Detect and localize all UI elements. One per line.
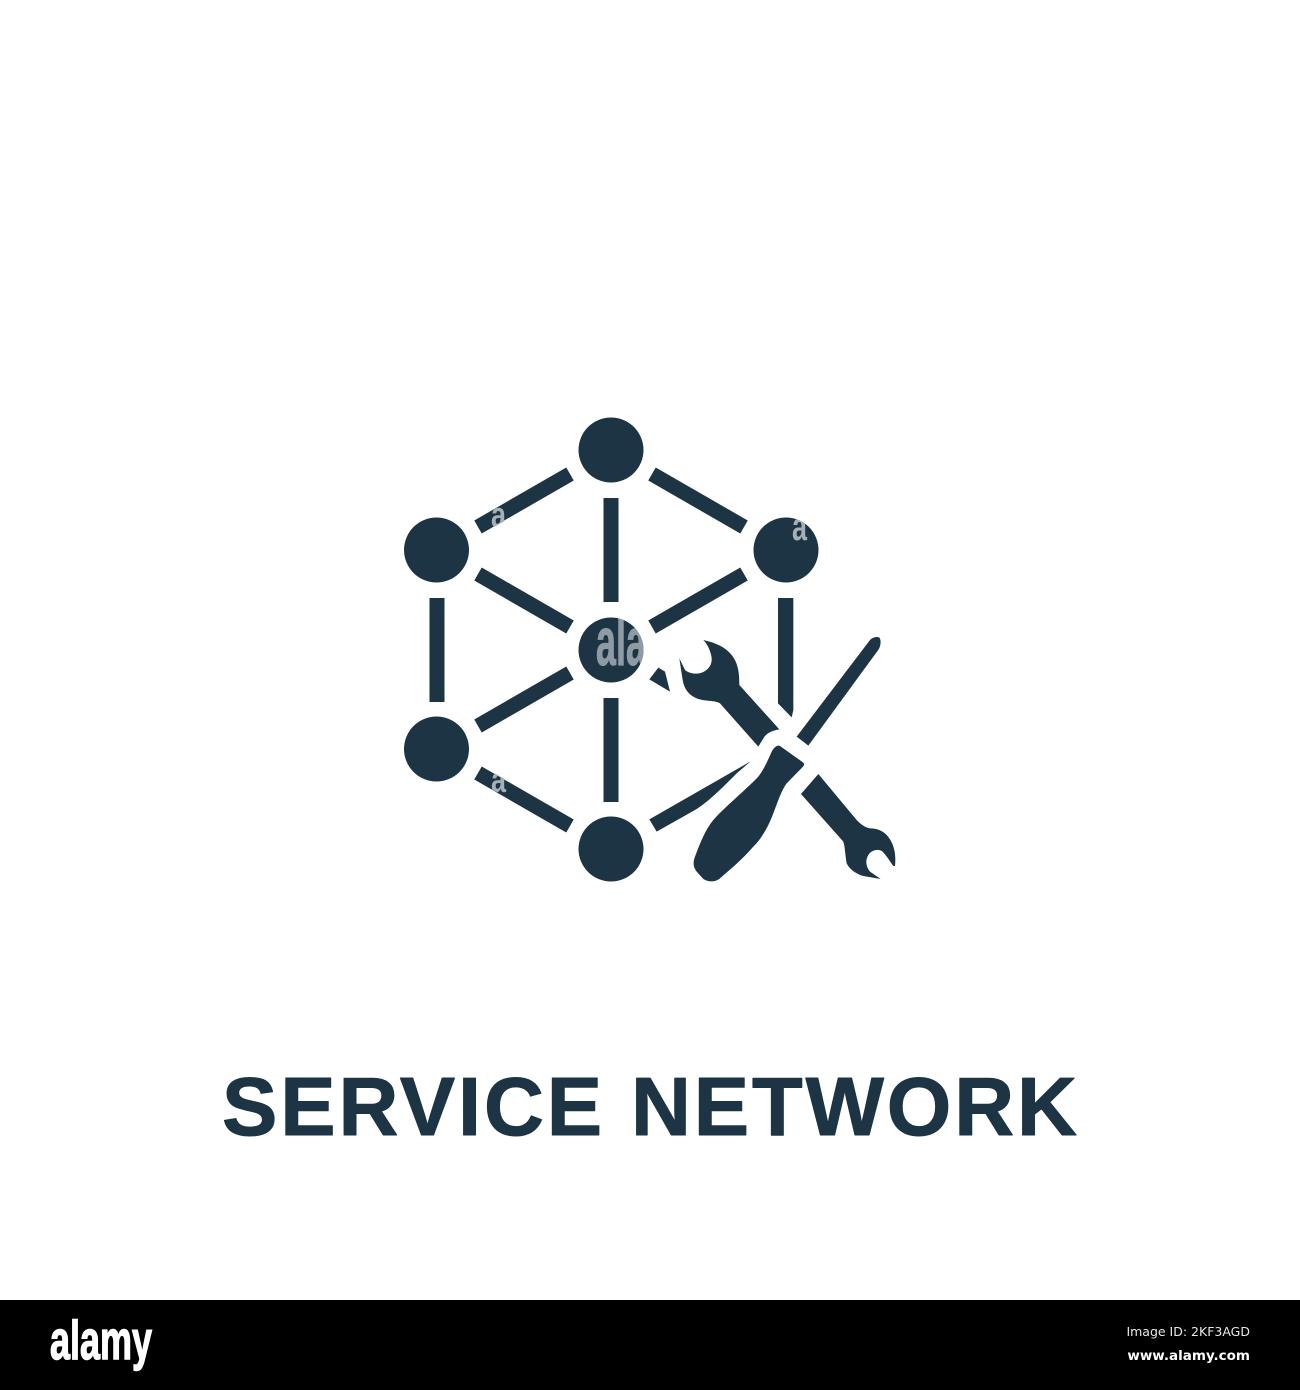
watermark on right node: a [792, 505, 808, 549]
title: SERVICE NETWORK [222, 1060, 1077, 1153]
footer band [0, 1300, 1300, 1390]
icon: screwdriver handle [694, 746, 804, 881]
right vertical line [778, 598, 793, 717]
icon: wrench upper half [679, 640, 779, 747]
icon: wrench lower half [801, 774, 895, 879]
network nodes [404, 418, 818, 882]
watermark on upper left line: a [491, 494, 507, 535]
watermark over hub node: ala [596, 604, 647, 680]
alamy logo: alamy [50, 1309, 152, 1371]
watermark on lower left line: a [491, 759, 507, 800]
website: www.alamy.com [1127, 1348, 1250, 1364]
icon: screwdriver blade [797, 637, 881, 746]
icon: service network [404, 418, 895, 882]
line fragment [649, 668, 670, 692]
tools drawn at 3x coordinates [649, 598, 895, 881]
lower right edge line [649, 761, 751, 832]
image id: Image ID: 2KF3AGD [1126, 1324, 1250, 1339]
network connecting lines [437, 474, 744, 826]
